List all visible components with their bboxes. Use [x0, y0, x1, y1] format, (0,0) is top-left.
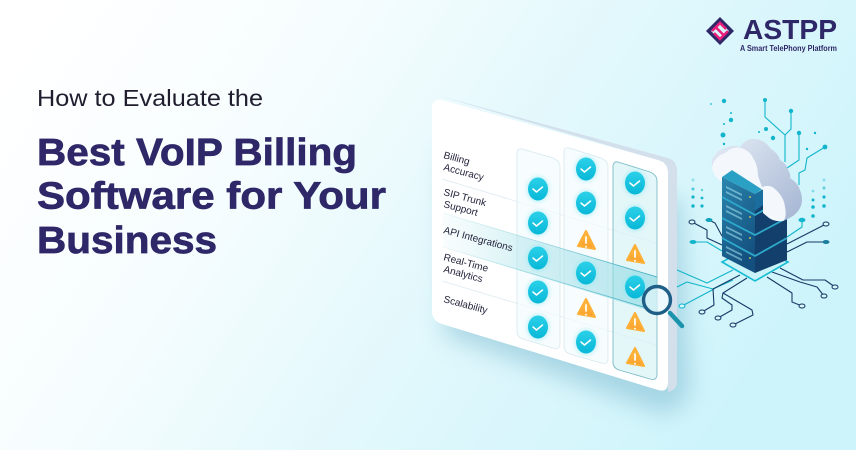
label: Billing Accuracy [442, 150, 485, 184]
title block [37, 85, 386, 262]
label: Real-Time Analytics: Real-Time [442, 252, 490, 275]
highlighted row band [443, 213, 657, 313]
title: main heading [37, 132, 386, 262]
column 1 [517, 149, 560, 348]
label: Scalability: Scalability [442, 294, 489, 317]
title: main heading: Software for Your [37, 176, 386, 218]
server stack [722, 170, 787, 273]
row dividers [442, 179, 656, 345]
logo tagline: A Smart TelePhony Platform [740, 43, 837, 53]
title: main heading: Business [37, 220, 217, 262]
label: Real-Time Analytics: Analytics [442, 264, 484, 285]
label: Billing Accuracy: Billing [442, 150, 471, 168]
circuit nodes and dots [690, 98, 827, 244]
circuit traces [677, 100, 835, 325]
column 2 [564, 148, 608, 364]
label: SIP Trunk Support: Support [442, 199, 479, 219]
card face [432, 100, 668, 391]
title: intro line: How to Evaluate the [37, 85, 263, 111]
logo wordmark: ASTPP [743, 14, 837, 45]
cloud [712, 139, 802, 221]
panel: comparison card [432, 96, 690, 415]
label: Billing Accuracy: Accuracy [442, 162, 485, 184]
row labels [442, 150, 514, 317]
label: Real-Time Analytics [442, 252, 490, 285]
icon: magnifying glass [644, 286, 682, 326]
warning icons [578, 231, 644, 366]
label: SIP Trunk Support [442, 187, 488, 219]
server top face [722, 170, 765, 194]
server front face [722, 177, 755, 273]
cloud front [712, 148, 786, 221]
server base plate [722, 244, 788, 281]
illustration: cloud server [677, 98, 838, 327]
check icons [527, 156, 646, 354]
server right face [755, 176, 787, 273]
title: main heading: Best VoIP Billing [37, 132, 357, 174]
label: SIP Trunk Support: SIP Trunk [442, 187, 488, 209]
logo: ASTPP [706, 14, 837, 53]
label: API Integrations: API Integrations [442, 225, 514, 254]
card side edge [440, 96, 677, 392]
icon: logo diamond [706, 17, 734, 45]
cloud side [712, 139, 802, 221]
column 3 highlighted [613, 162, 657, 379]
